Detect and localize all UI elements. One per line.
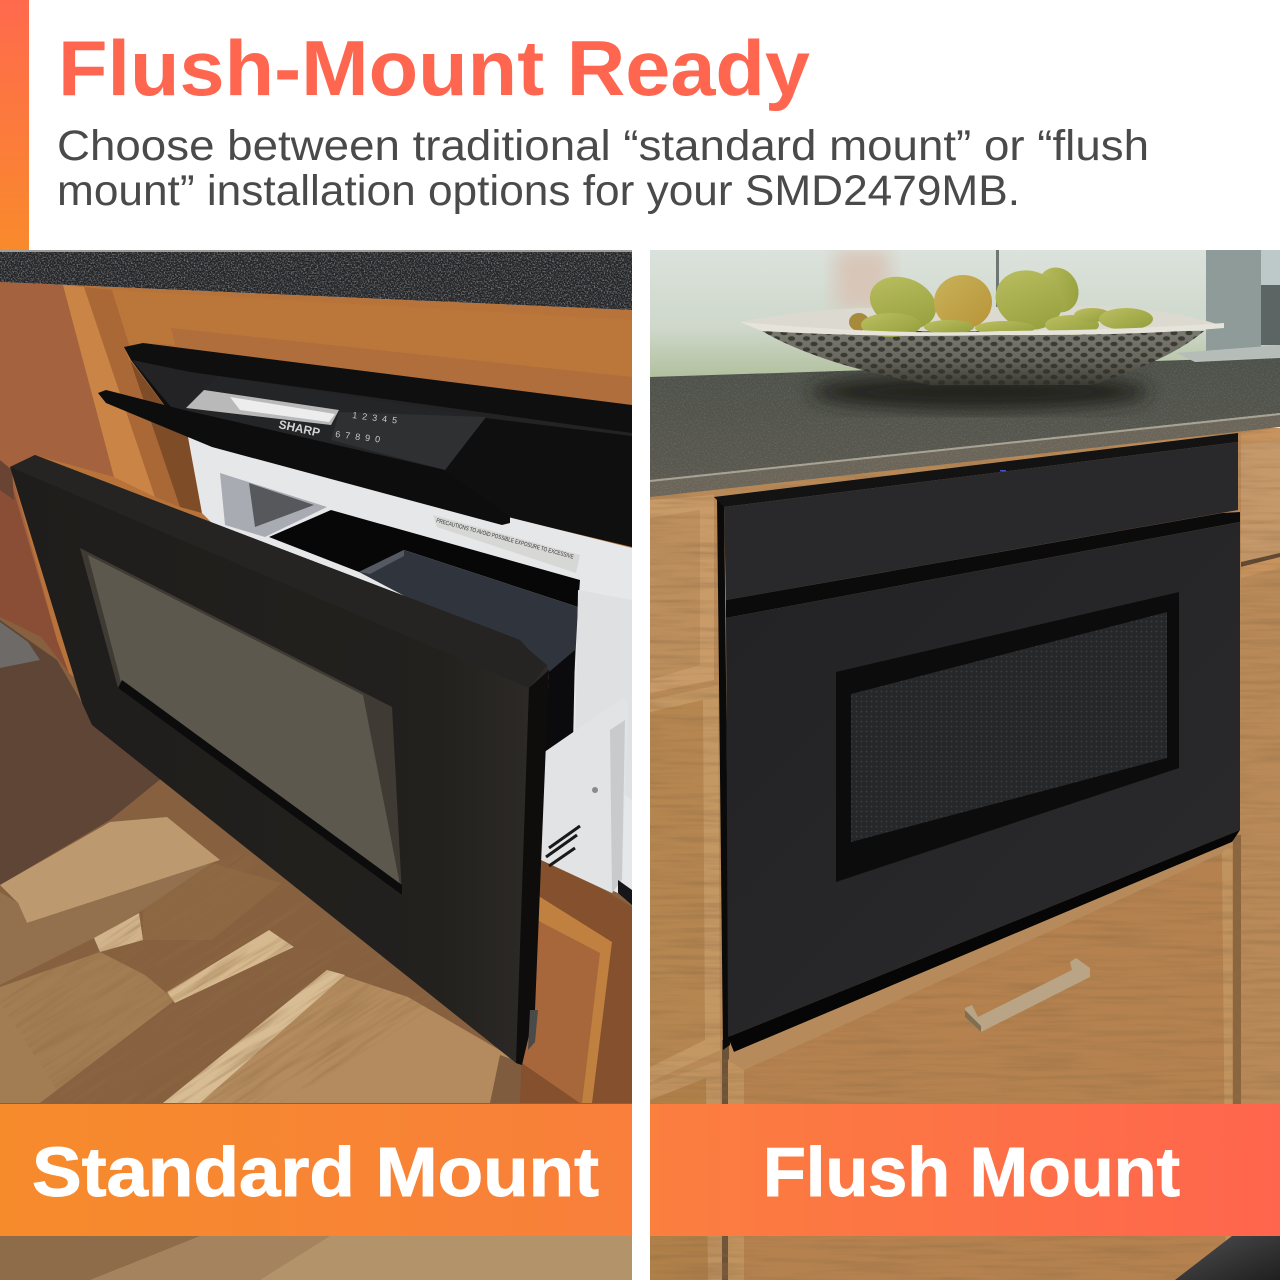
label bar: standard mount: Standard Mount [32,1133,599,1211]
oven door [726,522,1240,1037]
top control band [724,442,1238,600]
lower drawer trim shading [728,842,1232,1070]
dark gap [546,650,575,752]
white drawer interior [188,437,632,900]
cabinets [650,428,1280,1280]
title: Flush-Mount Ready [58,24,810,112]
wood grain [650,428,1280,1280]
drawer handle [965,958,1090,1032]
cabinet [0,282,632,678]
bowl interior [742,306,1216,331]
subtitle: Choose between traditional “standard mount” or “flush [57,122,1149,170]
floor [0,610,632,1280]
keypad numbers: 6 7 8 9 0 [335,429,381,444]
drawer door [10,455,549,1065]
accent side bar [0,0,29,250]
subtitle [57,122,1149,215]
apples [849,261,1153,339]
oven window mesh [851,612,1167,842]
bowl body [762,331,1204,385]
bracket [541,720,632,905]
blue indicator [1000,470,1006,472]
subtitle: mount” installation options for your SMD2479MB. [57,167,1020,215]
lower cabinet door [520,845,632,1103]
countertop [650,345,1280,497]
fruit bowl [740,261,1224,385]
oven housing [124,343,632,547]
lower drawer [728,840,1232,1280]
label bar: flush mount: Flush Mount [763,1133,1180,1211]
top lip [714,433,1238,507]
floor grain [99,916,421,1103]
panel: standard mount photo [0,250,632,1280]
floor shadow under drawer [1175,1236,1280,1280]
handle and control panel [98,376,510,525]
panel: flush mount photo [650,250,1280,1280]
white side panel [577,590,580,622]
window background [650,250,1280,390]
keypad numbers top row: 1 2 3 4 5 [352,410,398,425]
bowl front rim [740,322,1224,336]
side shadow [717,497,730,1050]
oven window frame [836,592,1179,882]
label bar: standard mount [0,1104,632,1236]
countertop [0,250,632,312]
oven [714,433,1240,1052]
header [57,24,1149,215]
control panel label: SHARP [277,417,321,440]
gap [726,512,1240,618]
bottom shadow [728,830,1240,1052]
warning label text: PRECAUTIONS TO AVOID POSSIBLE EXPOSURE TO EXCESSIVE [435,518,574,561]
door window [80,548,402,895]
label bar: flush mount [650,1104,1280,1236]
